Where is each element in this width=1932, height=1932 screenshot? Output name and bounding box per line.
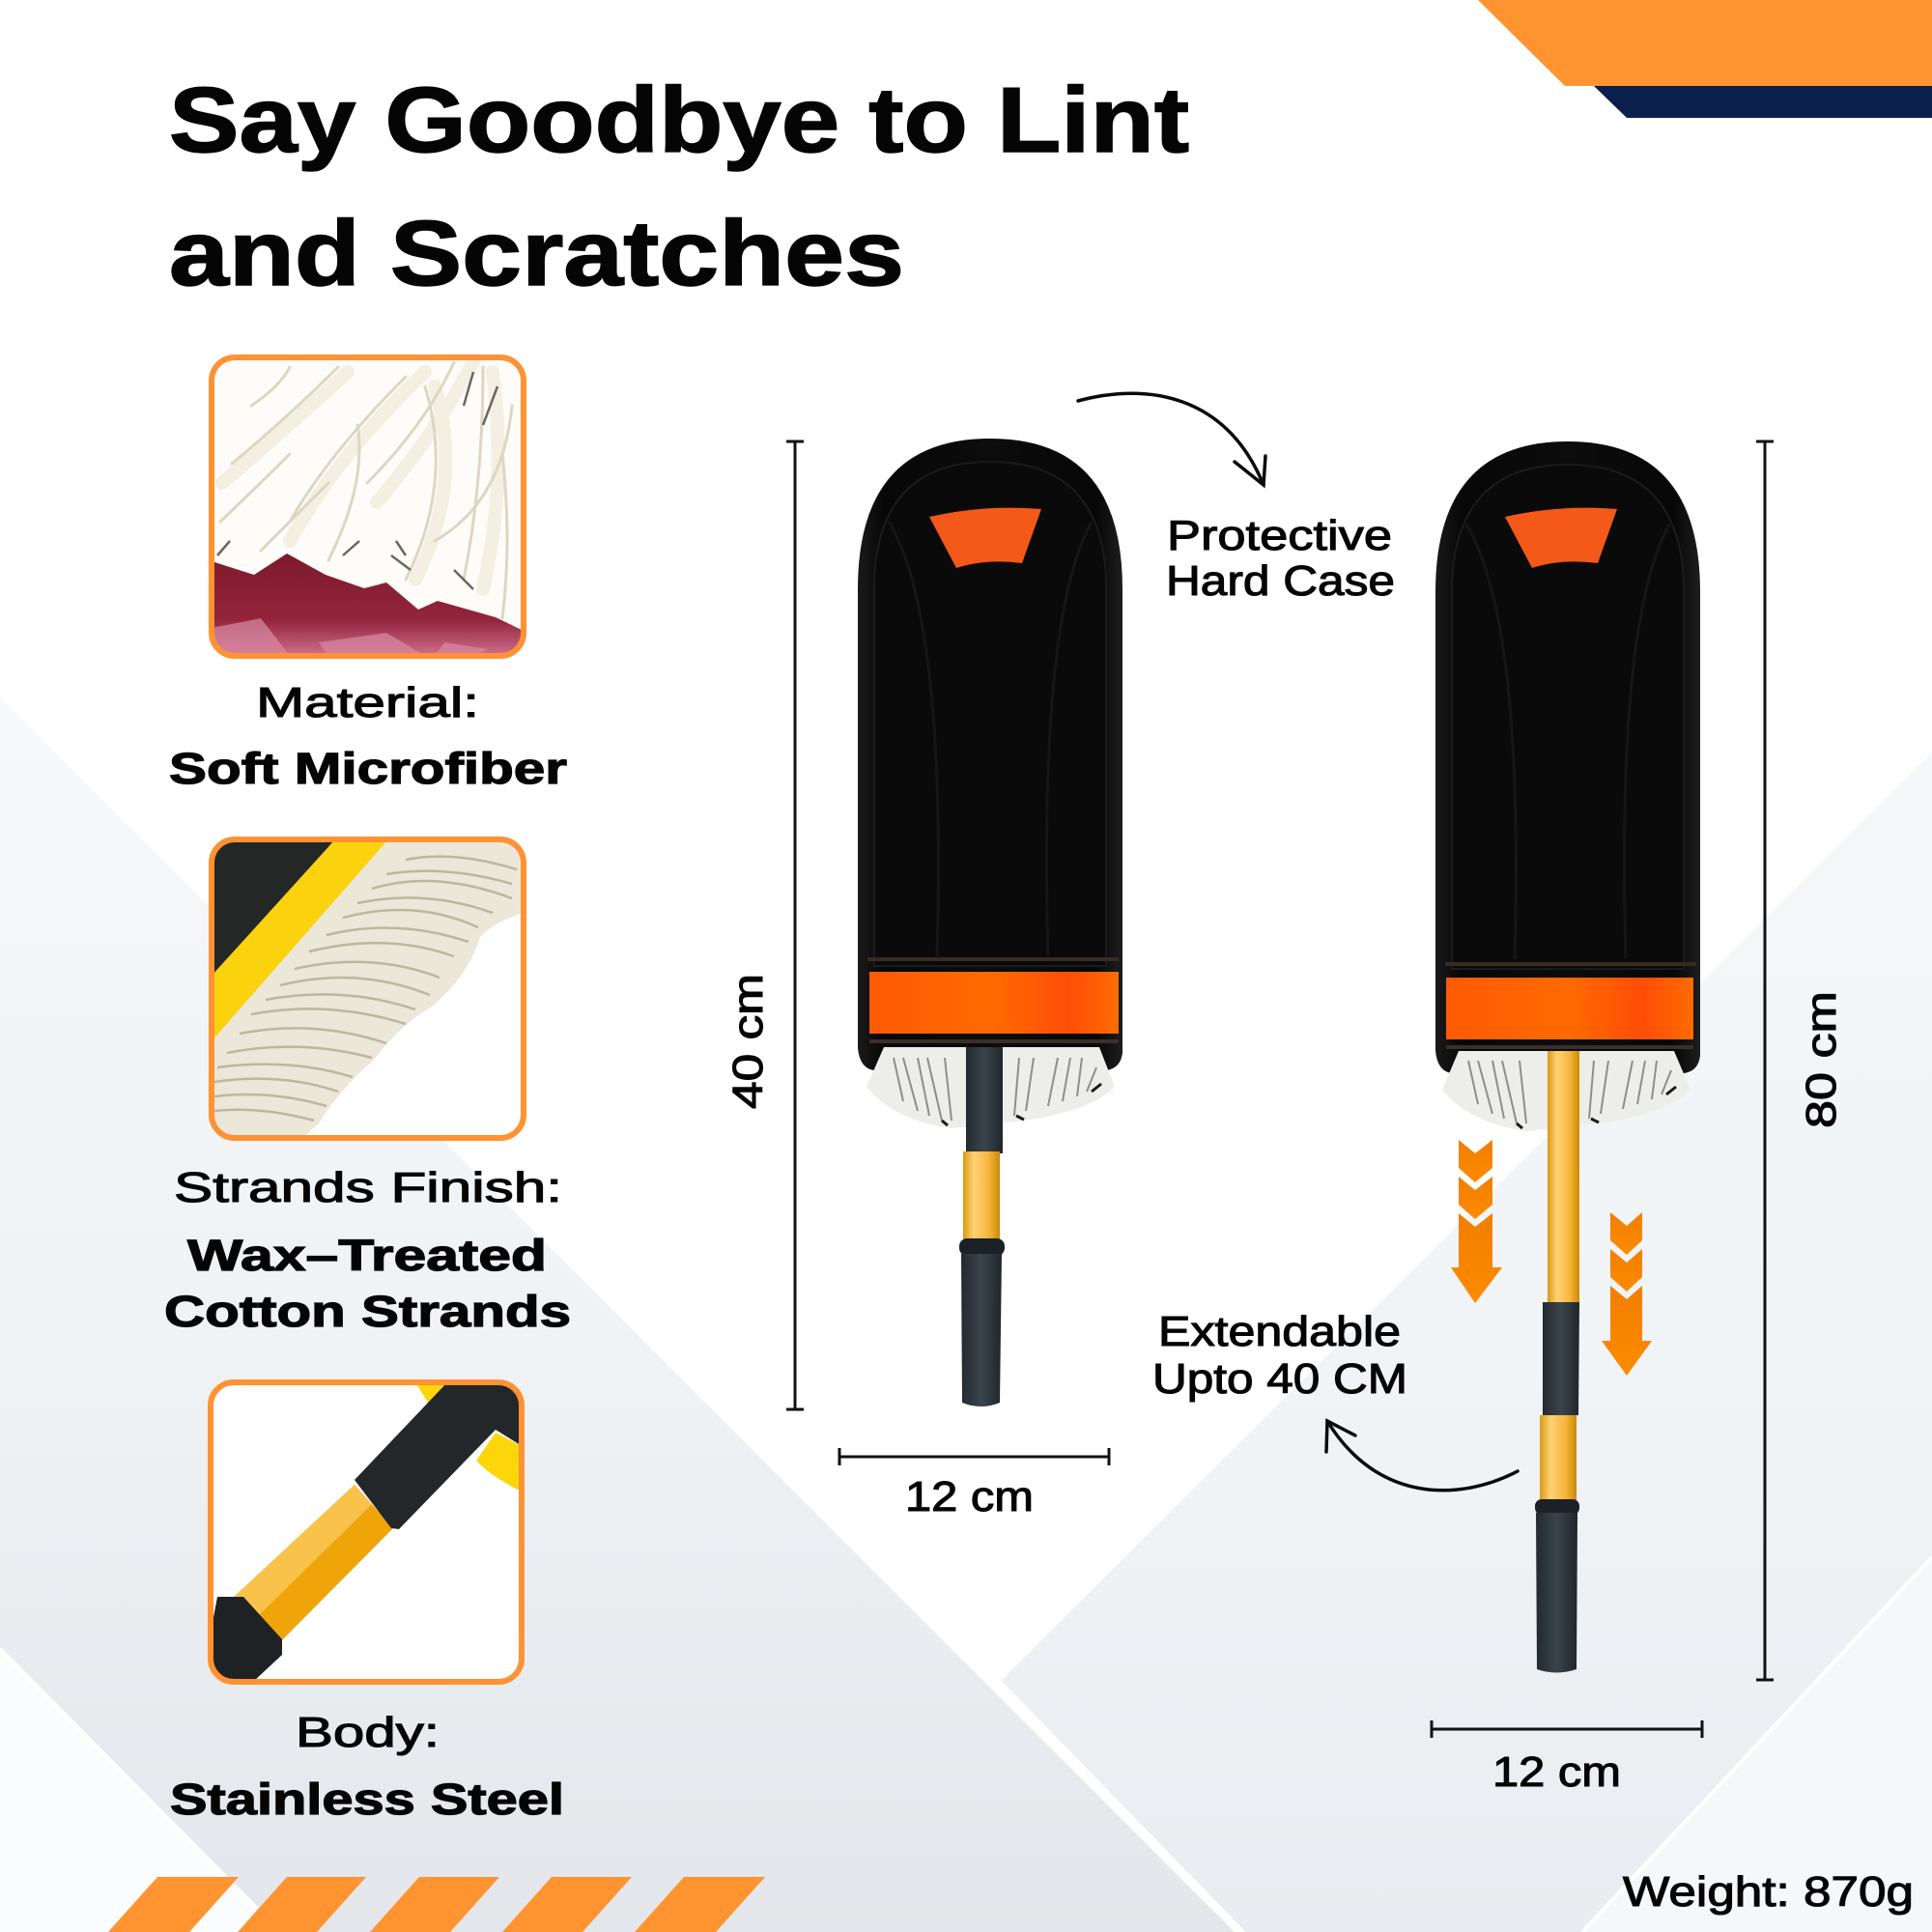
material label [169, 679, 567, 793]
title [169, 69, 1189, 305]
label: protective hard case [1166, 512, 1395, 605]
arrow: to protective hard case [1078, 393, 1265, 485]
dimension: 40 cm height [724, 441, 804, 1409]
strands label: Strands Finish: [174, 1164, 562, 1211]
dimension: 12 cm width, short mop [839, 1448, 1109, 1520]
corner decoration: top right [1478, 0, 1932, 118]
weight label: Weight: 870g [1623, 1868, 1914, 1916]
panel: body photo [211, 1382, 524, 1682]
label: extendable: Extendable [1158, 1308, 1401, 1355]
label: extendable [1152, 1308, 1407, 1403]
arrow: to extendable label [1326, 1421, 1518, 1491]
strands label [164, 1164, 571, 1336]
label: protective hard case: Protective [1167, 512, 1392, 559]
dimension: 40 cm height: 40 cm [724, 974, 772, 1109]
panel: strands photo [212, 839, 524, 1138]
mop: retracted [858, 439, 1122, 1406]
corner decoration: bottom stripes [108, 1877, 765, 1932]
material label: Soft Microfiber [169, 744, 567, 793]
arrow: extension chevrons left [1451, 1140, 1502, 1303]
body label: Body: [296, 1709, 440, 1756]
label: protective hard case: Hard Case [1166, 557, 1395, 605]
panel: material photo [212, 357, 524, 656]
dimension: 12 cm width, long mop [1432, 1720, 1702, 1796]
arrow: extension chevrons right [1602, 1212, 1652, 1376]
dimension: 12 cm width, long mop: 12 cm [1492, 1748, 1621, 1796]
mop: extended [1435, 441, 1700, 1673]
strands label: Wax–Treated [187, 1231, 547, 1280]
strands label: Cotton Strands [164, 1287, 571, 1336]
title: Say Goodbye to Lint [169, 69, 1189, 172]
dimension: 80 cm height: 80 cm [1798, 991, 1845, 1128]
body label [170, 1709, 564, 1824]
dimension: 80 cm height [1756, 441, 1845, 1680]
label: extendable: Upto 40 CM [1152, 1355, 1407, 1403]
title: and Scratches [169, 202, 904, 305]
body label: Stainless Steel [170, 1775, 564, 1824]
dimension: 12 cm width, short mop: 12 cm [905, 1473, 1034, 1520]
material label: Material: [256, 679, 479, 726]
